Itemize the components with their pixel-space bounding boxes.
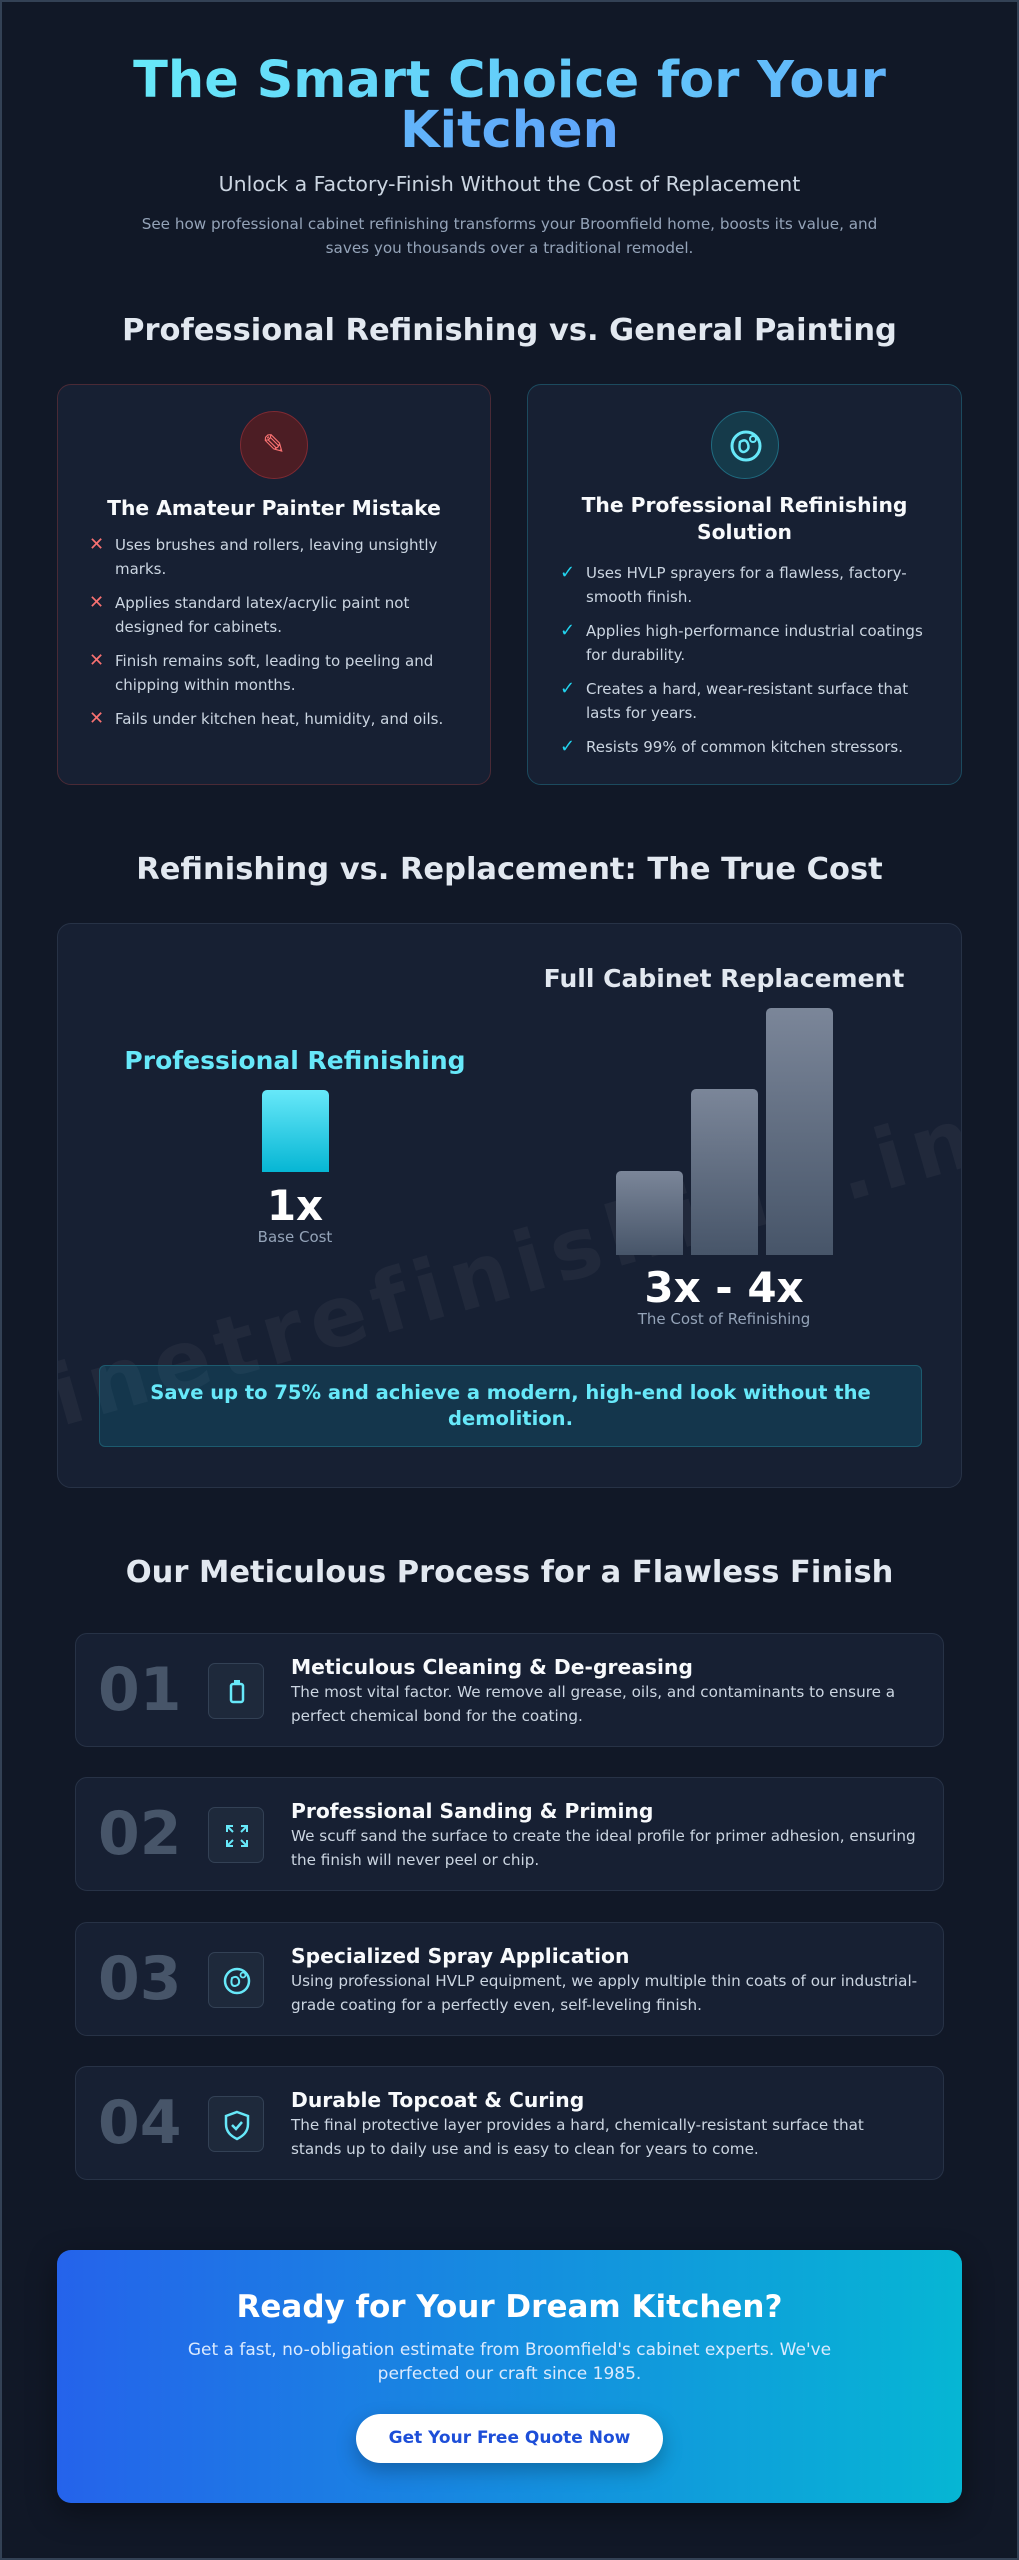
panel: amateur painter: ✕ bbox=[89, 650, 104, 671]
step 4: The final protective layer provides a hard, chemically-resistant surface that stands up to daily use and is easy to clean for years to come. bbox=[291, 2116, 864, 2158]
bullet list: benefits: Applies high-performance industrial coatings for durability. bbox=[586, 622, 923, 664]
card title: The Amateur Painter Mistake bbox=[107, 496, 441, 520]
panel: amateur painter: ✕ bbox=[89, 534, 104, 555]
step 2 bbox=[75, 1777, 944, 1891]
bullet list: benefits: Resists 99% of common kitchen stressors. bbox=[586, 738, 903, 756]
label: full replacement: Full Cabinet Replacement bbox=[544, 964, 904, 993]
subtitle: Unlock a Factory-Finish Without the Cost of Replacement bbox=[219, 172, 800, 196]
bullet list: mistakes: Finish remains soft, leading to peeling and chipping within months. bbox=[115, 652, 433, 694]
bullet list: mistakes: Applies standard latex/acrylic paint not designed for cabinets. bbox=[115, 594, 409, 636]
value: 3x-4x: 3x - 4x bbox=[644, 1263, 804, 1312]
title: The Smart Choice for Your bbox=[133, 51, 886, 110]
panel: professional solution bbox=[527, 384, 962, 785]
title bbox=[133, 51, 886, 160]
step 3 bbox=[75, 1922, 944, 2036]
step 1 bbox=[75, 1633, 944, 1747]
title: Kitchen bbox=[400, 101, 619, 160]
icon: shield bbox=[208, 2096, 264, 2152]
bullet list: benefits: Creates a hard, wear-resistant surface that lasts for years. bbox=[586, 680, 908, 722]
icon: expand arrows bbox=[208, 1807, 264, 1863]
button bbox=[356, 2414, 663, 2463]
step 1: Meticulous Cleaning & De-greasing bbox=[291, 1655, 693, 1679]
step 2: 02 bbox=[98, 1799, 182, 1869]
panel: professional solution: ✓ bbox=[560, 620, 575, 641]
CTA panel bbox=[57, 2250, 962, 2503]
bar: refinishing bbox=[262, 1090, 329, 1172]
label: professional refinishing: Professional Refinishing bbox=[124, 1046, 466, 1075]
step 4: Durable Topcoat & Curing bbox=[291, 2088, 584, 2112]
caption: cost of refinishing: The Cost of Refinishing bbox=[638, 1310, 810, 1328]
caption: base cost: Base Cost bbox=[258, 1228, 332, 1246]
icon: spray bbox=[711, 411, 779, 479]
callout: savings: Save up to 75% and achieve a modern, high-end look without the demolition. bbox=[150, 1381, 871, 1430]
step 1: The most vital factor. We remove all grease, oils, and contaminants to ensure a perfect chemical bond for the coating. bbox=[291, 1683, 895, 1725]
icon: broken brush: ✎ bbox=[262, 428, 286, 461]
step 3: 03 bbox=[98, 1944, 182, 2014]
bullet list: mistakes: Fails under kitchen heat, humidity, and oils. bbox=[115, 710, 443, 728]
button: Get Your Free Quote Now bbox=[389, 2428, 630, 2448]
intro text: See how professional cabinet refinishing transforms your Broomfield home, boosts its value, and saves you thousands over a traditional remodel. bbox=[142, 215, 877, 257]
heading: process: Our Meticulous Process for a Flawless Finish bbox=[126, 1555, 893, 1590]
callout: savings bbox=[99, 1365, 922, 1447]
icon: broken brush bbox=[240, 411, 308, 479]
panel: professional solution: ✓ bbox=[560, 678, 575, 699]
bullet list: benefits bbox=[560, 562, 923, 757]
CTA text: Get a fast, no-obligation estimate from Broomfield's cabinet experts. We've perfected our craft since 1985. bbox=[188, 2340, 831, 2384]
panel: amateur painter bbox=[57, 384, 491, 785]
step 2: We scuff sand the surface to create the ideal profile for primer adhesion, ensuring the finish will never peel or chip. bbox=[291, 1827, 916, 1869]
panel: amateur painter: ✕ bbox=[89, 592, 104, 613]
heading: comparison: Professional Refinishing vs. General Painting bbox=[122, 313, 897, 348]
panel: professional solution: ✓ bbox=[560, 562, 575, 583]
bullet list: mistakes: Uses brushes and rollers, leaving unsightly marks. bbox=[115, 536, 437, 578]
icon: bottle bbox=[208, 1663, 264, 1719]
bullet list: mistakes bbox=[89, 534, 443, 729]
card title: The Professional Refinishing Solution bbox=[582, 493, 907, 544]
CTA title: Ready for Your Dream Kitchen? bbox=[237, 2289, 782, 2325]
panel: amateur painter: ✕ bbox=[89, 708, 104, 729]
panel: professional solution: ✓ bbox=[560, 736, 575, 757]
step 2: Professional Sanding & Priming bbox=[291, 1799, 653, 1823]
heading: true cost: Refinishing vs. Replacement: The True Cost bbox=[136, 852, 883, 887]
value: 1x: 1x bbox=[267, 1181, 323, 1230]
step 4 bbox=[75, 2066, 944, 2180]
step 4: 04 bbox=[98, 2088, 182, 2158]
icon: spray bbox=[208, 1952, 264, 2008]
panel: cost comparison bbox=[57, 923, 962, 1488]
bullet list: benefits: Uses HVLP sprayers for a flawless, factory-smooth finish. bbox=[586, 564, 907, 606]
step 3: Using professional HVLP equipment, we apply multiple thin coats of our industrial-grade coating for a perfectly even, self-leveling finish. bbox=[291, 1972, 917, 2014]
step 3: Specialized Spray Application bbox=[291, 1944, 629, 1968]
step 1: 01 bbox=[98, 1655, 182, 1725]
bar chart: replacement bbox=[616, 1008, 833, 1255]
